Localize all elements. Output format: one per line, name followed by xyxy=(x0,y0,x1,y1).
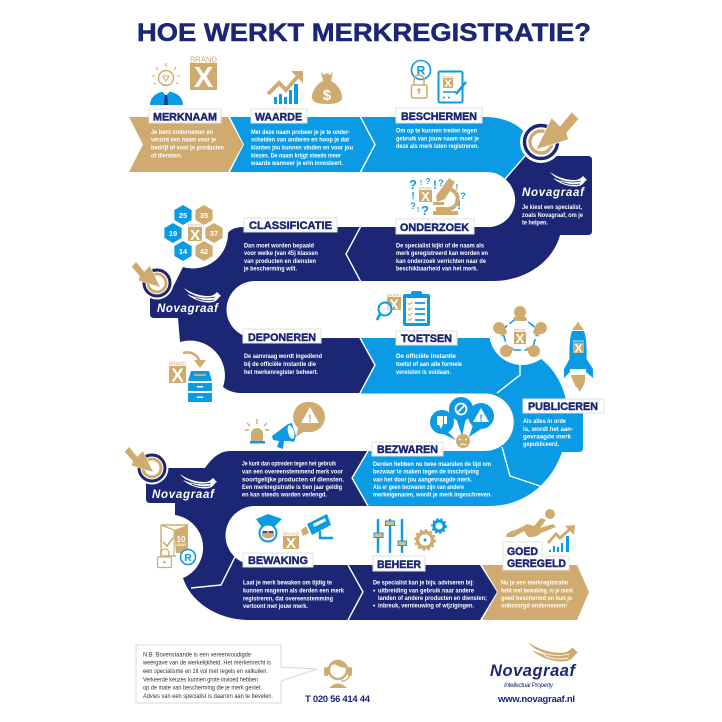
icon: question marks and brand X with microscope: ! xyxy=(417,207,419,214)
panel: onderzoek: merk geregistreerd kan worden en xyxy=(396,250,488,257)
icon: question marks and brand X with microscope: ! xyxy=(456,183,458,192)
panel: beheer xyxy=(373,556,487,610)
panel: bezwaren: van het door jou aangevraagde merk. xyxy=(373,476,472,483)
panel: classificatie: je bescherming wilt. xyxy=(243,266,297,273)
panel: beheer: landen of andere producten en diensten; xyxy=(378,595,487,602)
callout: disclaimer: Verkeerde keuzes kunnen grote invloed hebben xyxy=(143,676,258,683)
panel: goed geregeld: onbezorgd ondernemen! xyxy=(501,603,567,610)
panel: novagraaf logo left lower xyxy=(152,474,217,501)
panel: beheer: uitbreiding van gebruik naar andere xyxy=(378,587,474,594)
callout: disclaimer: een specialisme en zit vol met regels en valkuilen. xyxy=(143,668,268,675)
band: merknaam arrow xyxy=(129,117,243,172)
icon: small growth chart xyxy=(548,525,575,552)
panel: bewaking xyxy=(243,553,344,610)
icon: hexagons with class numbers: 25 xyxy=(179,211,187,220)
icon: money bag xyxy=(312,72,342,104)
panel: classificatie: Dan moet worden bepaald xyxy=(244,242,314,249)
panel: bewaking: Laat je merk bewaken om tijdig te xyxy=(243,580,332,587)
panel: waarde: WAARDE xyxy=(255,111,302,123)
band: navy route from optreden through bewaking and beheer xyxy=(146,451,497,620)
panel: beschermen: gebruik van jouw naam moet je xyxy=(396,136,479,142)
logo: novagraaf intellectual property xyxy=(490,642,578,689)
icon: brand X entering filing cabinet xyxy=(169,352,212,402)
panel: bewaking: registreren, dat overeenstemming xyxy=(243,595,333,602)
icon: ten year door with lock and R: 10 xyxy=(177,535,186,544)
icon: security camera xyxy=(301,514,333,538)
band: toetsen, publiceren, bezwaren xyxy=(352,338,583,506)
icon: meeting circle of people xyxy=(489,299,555,365)
icon: business person with lightbulb xyxy=(150,63,183,105)
panel: classificatie: CLASSIFICATIE xyxy=(249,220,332,232)
panel: publiceren: Als alles in orde xyxy=(523,418,566,425)
icon: question marks and brand X with microscope: ? xyxy=(426,177,431,186)
icon: question marks and brand X with microscope: BRAND xyxy=(419,186,432,190)
icon: question marks and brand X with microscope: ! xyxy=(411,191,415,202)
icon: question marks and brand X with microscope: X xyxy=(421,189,430,204)
panel: waarde: kiezen. De naam krijgt steeds meer xyxy=(251,152,341,160)
panel: toetsen: vereisten is voldaan. xyxy=(396,369,451,376)
icon: clipboard with magnifier and brand X: BRAND xyxy=(387,292,401,298)
panel: merknaam: of diensten. xyxy=(151,152,182,160)
panel: bewaking: kunnen reageren als derden een merk xyxy=(243,587,344,594)
panel: publiceren: PUBLICEREN xyxy=(528,401,598,413)
panel: classificatie xyxy=(243,218,337,273)
panel: deponeren: DEPONEREN xyxy=(248,332,316,344)
title: HOE WERKT MERKREGISTRATIE? xyxy=(137,19,591,47)
icon: question marks and brand X with microscope: ? xyxy=(460,191,466,201)
panel: deponeren: bij de officiële instantie die xyxy=(244,361,316,368)
panel: merknaam: MERKNAAM xyxy=(153,111,217,123)
icon: gears xyxy=(416,520,445,548)
panel: bezwaren xyxy=(372,442,492,499)
panel: onderzoek: kan onderzoek verrichten naar de xyxy=(396,258,486,265)
panel: deponeren: De aanvraag wordt ingediend xyxy=(244,353,322,360)
callout: disclaimer xyxy=(136,645,317,703)
panel: publiceren xyxy=(523,399,604,448)
icon: megaphone xyxy=(272,423,296,449)
icon: warning bubble xyxy=(293,402,325,437)
panel: deponeren xyxy=(243,329,322,376)
panel: goed geregeld: goed beschermd en kun je xyxy=(501,595,572,602)
icon: hexagons with class numbers: 19 xyxy=(169,229,177,238)
icon: pointer arrow and ring top right xyxy=(520,112,578,163)
panel: onderzoek: De specialist kijkt of de naam als xyxy=(396,242,484,249)
panel: beschermen: deze als merk laten registreren. xyxy=(396,143,479,150)
icon: money bag: $ xyxy=(323,87,332,104)
panel: bezwaren: Als er geen bezwaren zijn van andere xyxy=(373,484,464,491)
logo: novagraaf intellectual property: Intellectual Property xyxy=(504,682,554,689)
callout: disclaimer: Advies van een specialist is daarom aan te bevelen. xyxy=(143,693,273,700)
icon: relaxing person xyxy=(506,509,556,537)
panel: optreden xyxy=(242,460,344,499)
panel: publiceren: gevraagde merk xyxy=(523,434,571,440)
icon: ten year door with lock and R: JAAR xyxy=(176,543,186,547)
panel: bezwaren: Derden hebben nu twee maanden de tijd om xyxy=(373,461,491,468)
panel: waarde xyxy=(250,109,353,167)
icon: warning bubble: ! xyxy=(308,413,312,425)
panel: bewaking: vertoont met jouw merk. xyxy=(243,603,308,610)
icon: rocket: X xyxy=(574,342,583,356)
icon: question marks and brand X with microscope: ? xyxy=(421,203,429,218)
panel: beschermen: Om op te kunnen treden tegen xyxy=(396,128,477,134)
band: goed geregeld arrow xyxy=(482,565,589,620)
icon: hexagons with class numbers: X xyxy=(190,227,200,244)
icon: question marks and brand X with microscope: ? xyxy=(410,201,416,211)
panel: beschermen xyxy=(396,108,482,150)
panel: toetsen: De officiële instantie xyxy=(396,353,456,360)
panel: beheer: inbreuk, vernieuwing of wijzigingen. xyxy=(378,603,474,610)
panel: toetsen xyxy=(396,331,462,376)
icon: question marks and brand X with microscope: ! xyxy=(433,178,437,192)
icon: brand X under surveillance xyxy=(283,532,300,552)
icon: hexagons with class numbers: 42 xyxy=(200,247,208,256)
panel: novagraaf logo left middle xyxy=(157,288,221,315)
panel: bezwaren: bezwaar te maken tegen de inschrijving xyxy=(373,469,479,476)
panel: beheer: • xyxy=(373,587,376,594)
icon: brand X merknaam: X xyxy=(194,62,214,94)
panel: goed geregeld: hebt met bewaking, is je merk xyxy=(501,587,573,594)
band: navy route from specialist through onderzoek, classificatie, deponeren xyxy=(150,156,592,393)
icon: clipboard with magnifier and brand X xyxy=(377,291,430,326)
panel: merknaam: Je bent ondernemer en xyxy=(151,129,213,136)
callout: disclaimer: N.B. Bovenstaande is een vereenvoudigde xyxy=(143,652,251,659)
panel: specialist novagraaf top right: zoals Novagraaf, om je xyxy=(522,212,583,219)
panel: specialist novagraaf top right: Novagraaf xyxy=(522,187,585,199)
icon: question marks and brand X with microscope xyxy=(409,177,466,218)
panel: merknaam: verzint een naam voor je xyxy=(151,136,216,144)
panel: bezwaren: BEZWAREN xyxy=(377,444,438,456)
panel: classificatie: van producten en diensten xyxy=(244,258,316,265)
panel: novagraaf logo left middle: Novagraaf xyxy=(157,303,219,315)
icon: hexagons with class numbers: 35 xyxy=(200,211,208,220)
icon: rocket xyxy=(564,322,593,392)
icon: siren xyxy=(245,419,269,444)
panel: specialist novagraaf top right: Je kiest een specialist, xyxy=(522,204,582,211)
icon: meeting circle of people: X xyxy=(516,331,525,346)
panel: specialist novagraaf top right: te helpen. xyxy=(522,220,548,226)
icon: meeting circle of people: BRAND xyxy=(514,328,526,332)
panel: optreden: Een merkregistratie is tien jaar geldig xyxy=(242,484,342,491)
panel: beheer: De specialist kan je bijv. adviseren bij: xyxy=(373,579,474,586)
panel: goed geregeld: GEREGELD xyxy=(507,558,566,570)
panel: waarde: Met deze naam probeer je je te onder- xyxy=(251,129,350,136)
panel: goed geregeld: Nu je een merkregistratie xyxy=(501,579,568,586)
icon: brand X under surveillance: X xyxy=(286,535,296,552)
panel: merknaam xyxy=(149,109,224,160)
icon: objection bubbles and angry face xyxy=(430,397,494,448)
icon: ten year door with lock and R: R xyxy=(184,552,192,564)
panel: waarde: waarde wanneer je erin investeert. xyxy=(250,160,343,167)
icon: registered mark and padlock xyxy=(412,60,430,98)
phone number: T 020 56 414 44 xyxy=(305,694,371,705)
icon: sliders xyxy=(374,520,406,552)
panel: waarde: scheiden van anderen en hoop je dat xyxy=(251,136,350,144)
icon: question marks and brand X with microscope: ? xyxy=(438,178,444,188)
icon: police officer xyxy=(256,514,282,542)
panel: optreden: van een overeenstemmend merk voor xyxy=(242,469,343,476)
icon: brand X merknaam xyxy=(190,56,217,94)
icon: hexagons with class numbers: BRAND xyxy=(188,222,202,228)
icon: brand X entering filing cabinet: X xyxy=(171,364,184,386)
icon: objection bubbles and angry face: ! xyxy=(479,414,483,424)
icon: brand X under surveillance: BRAND xyxy=(283,532,300,538)
icon: ten year door with lock and R xyxy=(158,525,196,568)
panel: goed geregeld: GOED xyxy=(507,546,538,558)
icon: hexagons with class numbers: 37 xyxy=(210,229,218,238)
icon: hexagons with class numbers: 14 xyxy=(179,247,188,256)
icon: question marks and brand X with microscope: ? xyxy=(409,177,417,192)
panel: toetsen: TOETSEN xyxy=(401,333,452,345)
icon: document with pen: BRAND xyxy=(443,74,454,78)
panel: waarde: klanten jou kunnen vinden en voor jou xyxy=(251,144,353,152)
icon: document with pen: X xyxy=(444,78,452,90)
panel: onderzoek: ONDERZOEK xyxy=(400,222,469,234)
icon: growth chart arrow xyxy=(268,71,303,104)
band: waarde and beschermen xyxy=(230,117,535,179)
panel: publiceren: gepubliceerd. xyxy=(523,441,559,448)
icon: question marks and brand X with microscope: ! xyxy=(420,180,422,187)
panel: deponeren: het merkenregister beheert. xyxy=(244,369,318,376)
panel: onderzoek: beschikbaarheid van het merk. xyxy=(396,266,478,273)
panel: goed geregeld xyxy=(501,542,573,610)
panel: optreden: en kan steeds worden verlengd. xyxy=(242,492,327,499)
icon: headset agent xyxy=(324,660,352,688)
icon: pointer arrow and ring left lower xyxy=(125,447,168,484)
logo: novagraaf intellectual property: Novagraaf xyxy=(490,662,576,680)
icon: brand X merknaam: BRAND xyxy=(190,56,217,64)
panel: beheer: • xyxy=(373,603,376,610)
panel: bewaking: BEWAKING xyxy=(248,555,308,567)
callout: disclaimer: op de mate van bescherming die je merk geniet. xyxy=(143,685,262,692)
panel: beschermen: BESCHERMEN xyxy=(401,111,477,123)
panel: onderzoek xyxy=(396,219,488,273)
panel: specialist novagraaf top right xyxy=(522,172,587,226)
panel: optreden: soortgelijke producten of diensten. xyxy=(242,476,344,483)
panel: merknaam: bedrijf of voor je producten xyxy=(151,144,224,152)
website: www.novagraaf.nl xyxy=(497,694,575,705)
panel: classificatie: voor welke (van 45) klassen xyxy=(244,250,318,257)
icon: document with pen xyxy=(438,72,466,102)
icon: rocket: BRAND xyxy=(573,340,585,344)
icon: pointer arrow and ring left middle xyxy=(132,262,174,300)
panel: optreden: Je kunt dan optreden tegen het gebruik xyxy=(242,460,336,467)
icon: question marks and brand X with microscope: ! xyxy=(457,198,461,212)
panel: novagraaf logo left lower: Novagraaf xyxy=(152,489,215,501)
callout: disclaimer: weergave van de werkelijkheid. Het merkenrecht is xyxy=(142,660,272,667)
icon: registered mark and padlock: R xyxy=(417,64,426,78)
panel: toetsen: toetst of aan alle formele xyxy=(396,361,462,368)
panel: publiceren: is, wordt het aan- xyxy=(523,426,573,433)
icon: hexagons with class numbers xyxy=(164,205,223,261)
panel: beheer: BEHEER xyxy=(377,559,421,571)
panel: bezwaren: merkeigenaren, wordt je merk ingeschreven. xyxy=(373,492,492,499)
icon: brand X entering filing cabinet: BRAND xyxy=(169,362,186,368)
icon: clipboard with magnifier and brand X: X xyxy=(389,296,399,312)
